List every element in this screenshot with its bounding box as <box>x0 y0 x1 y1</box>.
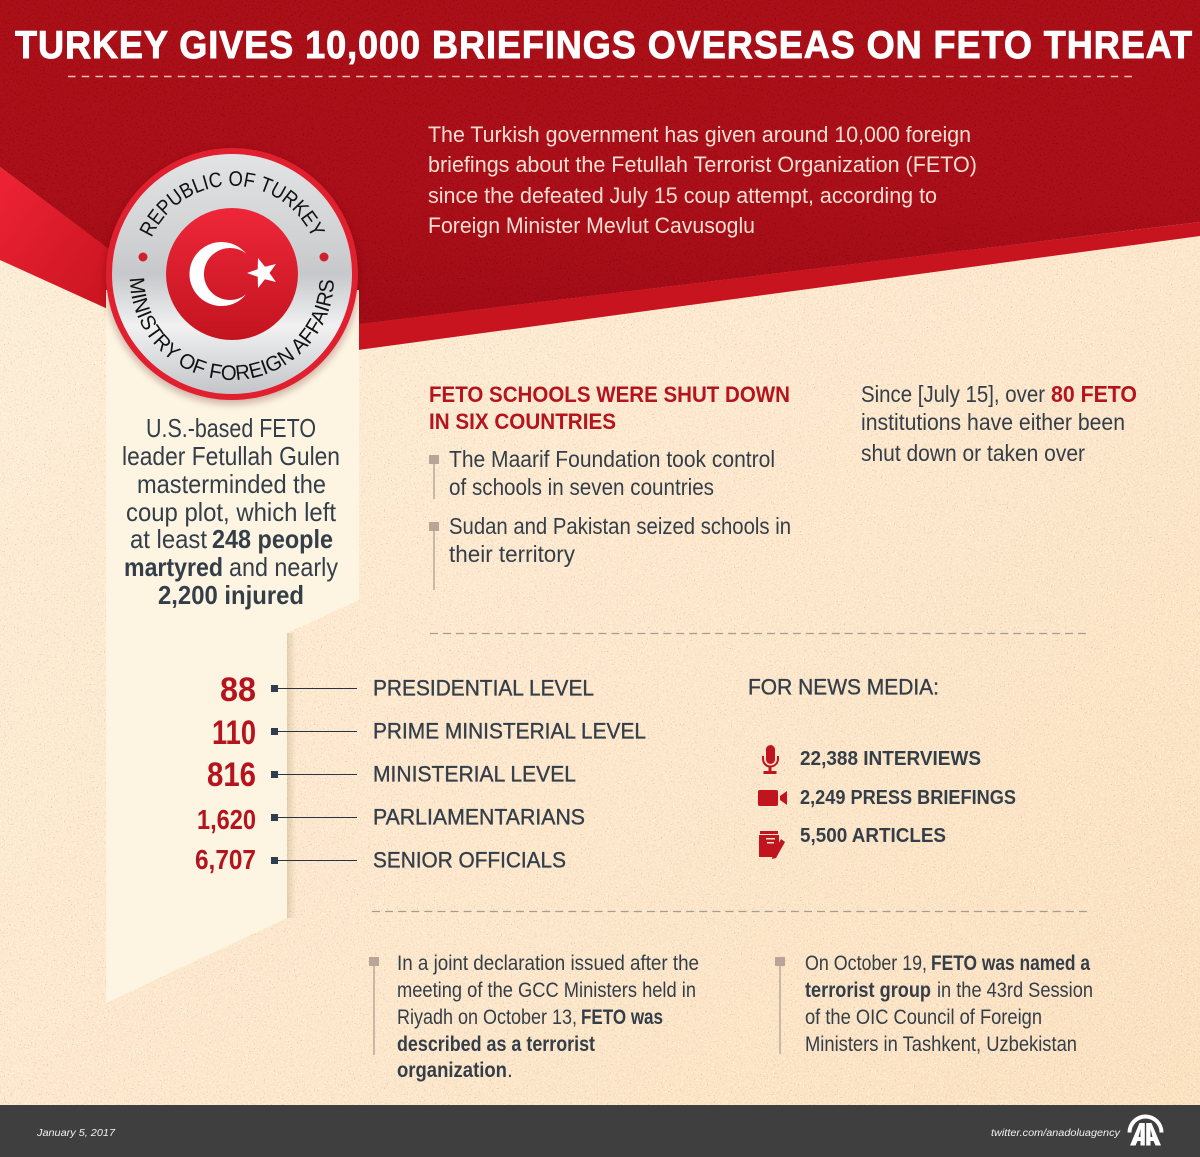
icon: video camera <box>758 790 787 806</box>
text block: GCC declaration <box>369 952 699 1082</box>
ribbon text block: leader Fetullah Gulen <box>122 441 340 471</box>
heading: IN SIX COUNTRIES <box>429 409 616 434</box>
ribbon text block: martyred <box>124 552 223 582</box>
bullet text: of schools in seven countries <box>449 474 714 500</box>
callout: 80 FETO institutions: 80 FETO <box>1051 381 1137 407</box>
intro text block: Foreign Minister Mevlut Cavusoglu <box>428 213 755 238</box>
bullet text: their territory <box>449 541 575 567</box>
icon: crescent and star <box>189 242 276 306</box>
row: senior officials: SENIOR OFFICIALS <box>373 848 566 872</box>
chart: briefing counts by level <box>195 671 646 875</box>
text block: GCC declaration: . <box>507 1059 513 1082</box>
red header banner <box>0 0 1200 350</box>
callout: 80 FETO institutions <box>861 381 1137 466</box>
heading: FETO SCHOOLS WERE SHUT DOWN <box>429 382 790 407</box>
seal text: Republic of Turkey: REPUBLIC OF TURKEY <box>139 171 326 236</box>
text block: GCC declaration: meeting of the GCC Ministers held in <box>397 979 696 1002</box>
text: interviews: 22,388 INTERVIEWS <box>800 748 981 770</box>
seal text: Ministry of Foreign Affairs: MINISTRY OF FOREIGN AFFAIRS <box>130 278 334 380</box>
row: presidential <box>220 671 594 709</box>
row: parliamentarians <box>197 804 585 835</box>
text block: OIC session <box>775 952 1093 1056</box>
row: ministerial <box>207 756 576 794</box>
ribbon text block: coup plot, which left <box>126 497 337 527</box>
text block: GCC declaration: FETO was <box>581 1006 663 1029</box>
icon: microphone <box>762 745 779 774</box>
row: prime ministerial: 110 <box>212 714 256 752</box>
text block: OIC session: FETO was named a <box>931 952 1090 975</box>
intro text block <box>428 122 977 238</box>
callout: 80 FETO institutions: institutions have either been <box>861 409 1125 435</box>
ribbon text block: masterminded the <box>137 469 326 499</box>
panel: ribbon with Gulen text <box>106 290 359 1003</box>
text block: GCC declaration: Riyadh on October 13, <box>397 1006 577 1029</box>
footer bar <box>0 1105 1200 1157</box>
ribbon text block: U.S.-based FETO <box>146 413 316 443</box>
row: ministerial: MINISTERIAL LEVEL <box>373 762 576 786</box>
row: senior officials: 6,707 <box>195 844 256 875</box>
row: senior officials <box>195 844 566 875</box>
text block: OIC session: On October 19, <box>805 952 927 975</box>
intro text block: since the defeated July 15 coup attempt, according to <box>428 183 937 208</box>
callout: 80 FETO institutions: Since [July 15], over <box>861 381 1045 407</box>
callout: 80 FETO institutions: shut down or taken over <box>861 440 1085 466</box>
text block: GCC declaration: described as a terrorist <box>397 1033 595 1056</box>
row: presidential: PRESIDENTIAL LEVEL <box>373 676 594 700</box>
bullet text <box>449 446 791 567</box>
row: ministerial: 816 <box>207 756 256 794</box>
text block: OIC session: terrorist group <box>805 979 931 1002</box>
text block: GCC declaration: organization <box>397 1059 507 1082</box>
row: parliamentarians: PARLIAMENTARIANS <box>373 804 585 830</box>
title divider <box>68 76 1132 78</box>
emblem: Ministry of Foreign Affairs seal <box>102 148 360 408</box>
heading <box>429 382 790 434</box>
ribbon text block <box>122 413 340 610</box>
text: articles: 5,500 ARTICLES <box>800 825 946 847</box>
ribbon text block: and nearly <box>229 552 338 582</box>
twitter handle: twitter.com/anadoluagency <box>991 1128 1121 1139</box>
text block: OIC session: Ministers in Tashkent, Uzbekistan <box>805 1033 1077 1056</box>
section: FETO schools <box>429 382 791 590</box>
icon: notebook and pencil <box>759 831 785 859</box>
row: prime ministerial: PRIME MINISTERIAL LEVEL <box>373 718 646 744</box>
text block: OIC session: of the OIC Council of Foreign <box>805 1006 1042 1029</box>
text block: GCC declaration: In a joint declaration issued after the <box>397 952 699 975</box>
row: parliamentarians: 1,620 <box>197 804 256 835</box>
heading: FOR NEWS MEDIA: <box>748 674 939 700</box>
panel: for news media <box>748 674 1016 859</box>
ribbon text block: at least <box>130 524 208 554</box>
text block: OIC session: in the 43rd Session <box>937 979 1093 1002</box>
row: presidential: 88 <box>220 671 256 709</box>
row: prime ministerial <box>212 714 646 752</box>
intro text block: The Turkish government has given around 10,000 foreign <box>428 122 971 147</box>
date: January 5, 2017 <box>36 1128 115 1139</box>
bullet marker <box>429 455 439 590</box>
bullet text: Sudan and Pakistan seized schools in <box>449 513 791 539</box>
icon: Anadolu Agency logo <box>1128 1114 1164 1146</box>
ribbon text block: 2,200 injured <box>158 580 304 610</box>
bullet text: The Maarif Foundation took control <box>449 446 775 472</box>
intro text block: briefings about the Fetullah Terrorist Organization (FETO) <box>428 152 977 177</box>
text: press briefings: 2,249 PRESS BRIEFINGS <box>800 787 1016 809</box>
ribbon text block: 248 people <box>212 524 333 554</box>
